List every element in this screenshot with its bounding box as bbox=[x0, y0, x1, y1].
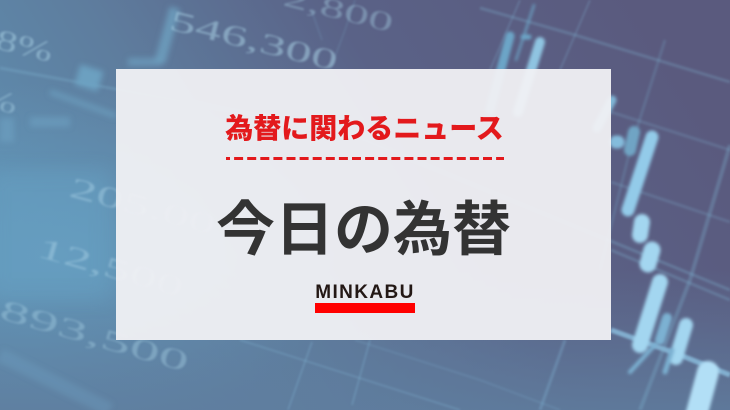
logo wordmark: MINKABU bbox=[315, 282, 415, 303]
main title: 今日の為替 bbox=[216, 197, 511, 263]
heading: red subtitle: 為替に関わるニュース bbox=[225, 113, 504, 144]
background figures bbox=[0, 0, 396, 378]
logo red bar bbox=[315, 303, 415, 313]
panel: translucent title card bbox=[116, 69, 611, 340]
logo: MINKABU bbox=[315, 282, 415, 313]
dashed red divider bbox=[226, 157, 504, 160]
background figures: 12,500 bbox=[34, 232, 187, 304]
background figures: 546,300 bbox=[166, 5, 341, 77]
background figures: 205.00 bbox=[66, 172, 219, 242]
candlesticks bbox=[490, 5, 708, 410]
left chart candles, soft bbox=[0, 8, 175, 410]
